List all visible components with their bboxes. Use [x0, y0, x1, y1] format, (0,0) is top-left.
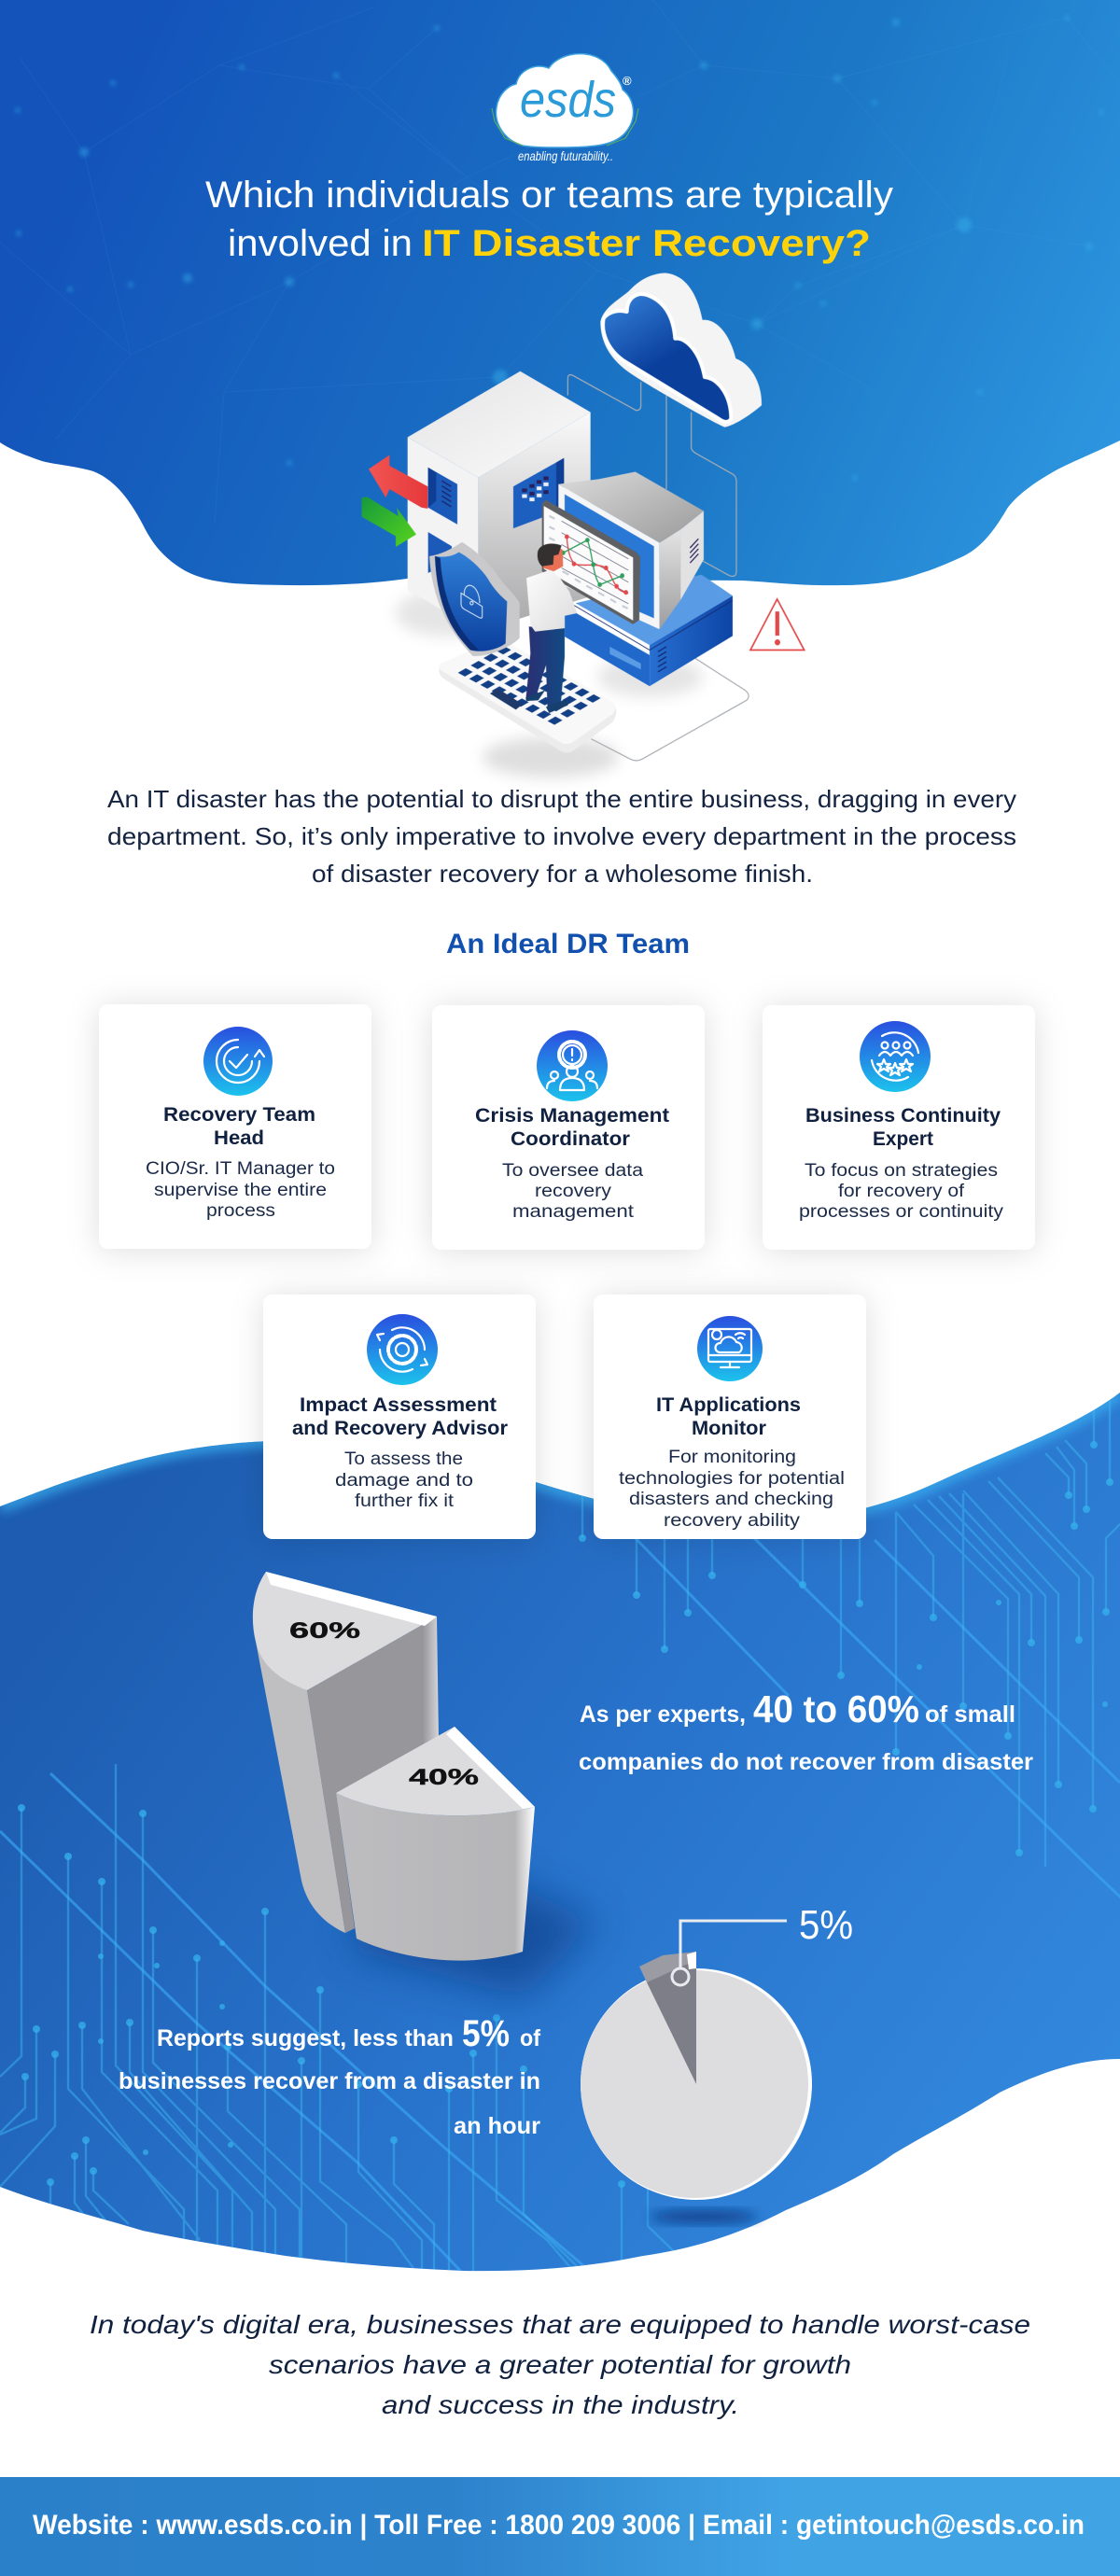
- illustration: disaster recovery server scene: [361, 273, 805, 777]
- icon: gear cycle: [367, 1314, 438, 1385]
- icon: crisis gear and people: [537, 1030, 608, 1101]
- description: technologies for potential: [619, 1469, 845, 1489]
- keyboard: [439, 639, 616, 752]
- description: [799, 1161, 1004, 1222]
- card: Impact Assessment and Recovery Advisor: [263, 1295, 536, 1539]
- title: Which individuals or teams are typically: [205, 175, 893, 216]
- 60% segment: [253, 1572, 439, 1933]
- icon: recovery check: [203, 1027, 273, 1096]
- header panel: blue wave with network: [0, 0, 1120, 585]
- closing statement: In today's digital era, businesses that are equipped to handle worst-case: [90, 2310, 1030, 2339]
- callout: 40 to 60 percent: 40 to 60%: [753, 1687, 919, 1730]
- chart tablet: [542, 500, 640, 624]
- description: To focus on strategies: [805, 1161, 998, 1181]
- footer bar: [0, 2477, 1120, 2576]
- closing statement: scenarios have a greater potential for growth: [269, 2350, 851, 2379]
- dark shadow behind bars: [343, 1872, 600, 2010]
- description: processes or continuity: [799, 1202, 1004, 1222]
- card: IT Applications Monitor: [594, 1295, 866, 1539]
- title: IT Disaster Recovery?: [422, 223, 871, 264]
- card: Crisis Management Coordinator: [432, 1005, 705, 1250]
- intro paragraph: of disaster recovery for a wholesome finish.: [312, 860, 813, 888]
- icon: monitor with cloud: [697, 1316, 763, 1381]
- raised 5% slice: [639, 1952, 696, 1982]
- heading: Head: [214, 1127, 264, 1149]
- section heading: An Ideal DR Team: [446, 929, 690, 959]
- callout: 40 to 60 percent: companies do not recover from disaster: [579, 1749, 1033, 1775]
- callout: less than 5 percent: 5%: [462, 2013, 510, 2054]
- green arrow: [361, 497, 416, 547]
- 5% leader line: [680, 1921, 787, 1969]
- logo wordmark: esds: [520, 72, 616, 128]
- description: [335, 1449, 473, 1511]
- heading: Business Continuity: [805, 1105, 1001, 1127]
- heading: Recovery Team: [163, 1104, 315, 1126]
- shield with lock: [429, 542, 520, 656]
- description: CIO/Sr. IT Manager to: [146, 1159, 335, 1179]
- title: involved in: [228, 223, 413, 264]
- callout: less than 5 percent: Reports suggest, less than: [157, 2025, 454, 2051]
- person: [525, 543, 577, 713]
- description: recovery ability: [664, 1511, 801, 1531]
- heading: Coordinator: [511, 1128, 630, 1150]
- callout: 40 to 60 percent: of small: [925, 1701, 1015, 1728]
- blue base unit: [565, 575, 733, 686]
- registered mark: ®: [623, 74, 632, 88]
- description: supervise the entire: [154, 1181, 327, 1200]
- callout: 40 to 60 percent: [579, 1687, 1033, 1775]
- closing statement: and success in the industry.: [382, 2390, 739, 2419]
- lower-left traces: [0, 1764, 681, 2277]
- pie chart: 5%: [581, 1902, 853, 2223]
- description: for recovery of: [838, 1182, 965, 1201]
- description: further fix it: [355, 1491, 455, 1511]
- 5% label: 5%: [799, 1902, 853, 1948]
- heading: IT Applications: [656, 1394, 801, 1416]
- warning triangle: [750, 599, 805, 650]
- callout: less than 5 percent: [119, 2013, 541, 2139]
- callout: less than 5 percent: businesses recover from a disaster in: [119, 2068, 540, 2094]
- lower blue panel with circuit traces: [0, 1393, 1120, 2277]
- heading: [475, 1105, 669, 1150]
- card: Recovery Team Head: [99, 1004, 371, 1249]
- callout: less than 5 percent: an hour: [454, 2113, 540, 2139]
- description: process: [206, 1201, 275, 1221]
- title: [205, 175, 893, 264]
- description: To assess the: [344, 1449, 463, 1469]
- pie ground shadow: [650, 2210, 758, 2223]
- 40% label: 40%: [409, 1765, 479, 1790]
- heading: [163, 1104, 315, 1149]
- intro paragraph: [107, 785, 1016, 888]
- heading: Impact Assessment: [300, 1394, 497, 1416]
- description: recovery: [535, 1182, 612, 1201]
- description: [502, 1161, 643, 1222]
- icon: team and stars: [860, 1021, 931, 1092]
- intro paragraph: department. So, it’s only imperative to involve every department in the process: [107, 822, 1016, 850]
- contact line: Website : www.esds.co.in | Toll Free : 1800 209 3006 | Email : getintouch@esds.co.in: [33, 2510, 1085, 2541]
- cloud: [600, 273, 762, 427]
- logo tagline: enabling futurability..: [518, 148, 613, 163]
- ground shadows: [395, 590, 703, 777]
- heading: Crisis Management: [475, 1105, 669, 1127]
- description: For monitoring: [668, 1448, 796, 1467]
- 40% segment: [336, 1727, 535, 1961]
- heading: [656, 1394, 801, 1439]
- heading: [292, 1394, 508, 1439]
- monitor: [558, 471, 704, 629]
- heading: and Recovery Advisor: [292, 1418, 508, 1439]
- card: Business Continuity Expert: [763, 1005, 1035, 1250]
- description: [619, 1448, 845, 1531]
- cable wires: [567, 375, 749, 761]
- callout: 40 to 60 percent: As per experts,: [580, 1701, 746, 1728]
- closing statement: [90, 2310, 1030, 2419]
- description: [146, 1159, 335, 1221]
- intro paragraph: An IT disaster has the potential to disrupt the entire business, dragging in every: [107, 785, 1016, 813]
- heading: [805, 1105, 1001, 1150]
- glow diagonals: [0, 1531, 1120, 2277]
- logo: esds cloud: [492, 54, 638, 163]
- 60% label: 60%: [289, 1618, 360, 1644]
- callout: less than 5 percent: of: [520, 2025, 541, 2051]
- red arrow: [369, 455, 427, 509]
- server tower: [408, 371, 591, 632]
- heading: Expert: [873, 1128, 933, 1150]
- description: disasters and checking: [629, 1490, 833, 1509]
- description: damage and to: [335, 1471, 473, 1491]
- heading: Monitor: [692, 1418, 766, 1439]
- description: management: [512, 1202, 635, 1222]
- upper-right traces: [582, 1400, 1120, 1867]
- description: To oversee data: [502, 1161, 643, 1181]
- 3D bar chart: 60% and 40%: [253, 1572, 535, 1961]
